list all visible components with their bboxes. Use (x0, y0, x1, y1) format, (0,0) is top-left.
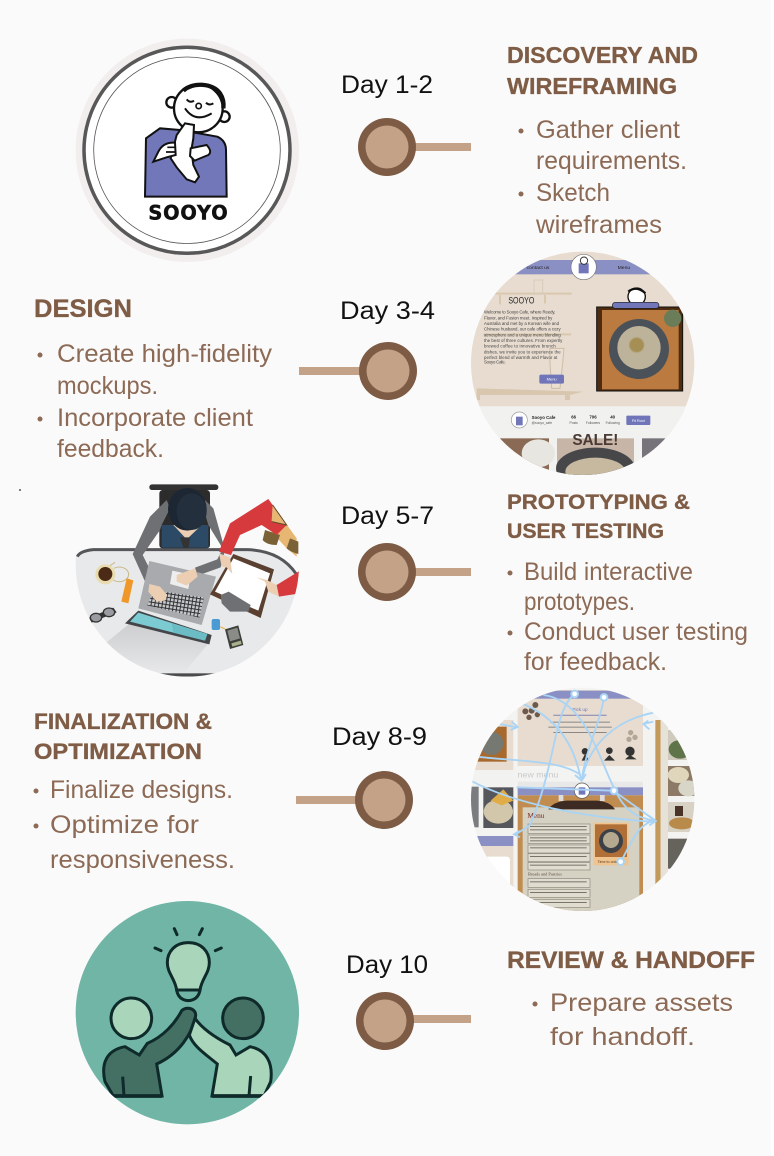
timeline day 3-4: Day 3-4 (340, 297, 435, 325)
step: design: DESIGN (34, 295, 132, 323)
instagram strip: Following (606, 421, 620, 425)
step: discovery and wireframing: Gather client (536, 116, 680, 144)
instagram strip: Sooyo Cafe (532, 415, 556, 420)
intro copy: Chinese husband, our cafe offers a cozy (484, 327, 561, 332)
step: discovery and wireframing: Sketch (536, 179, 610, 207)
menu screen on clipboard (518, 782, 643, 915)
timeline day 8-9 (296, 723, 427, 829)
chair and seated person (133, 484, 225, 587)
right person (189, 998, 271, 1096)
step: prototyping and user testing: USER TESTING (507, 520, 664, 543)
right photo column (655, 720, 698, 887)
instagram strip: 66 (571, 415, 577, 420)
timeline day 8-9: Day 8-9 (332, 723, 427, 751)
instagram strip: @sooyo_cafe (532, 421, 552, 425)
step: prototyping and user testing: prototypes. (524, 588, 635, 616)
intro copy: Flavor, and Fusion meet. Inspired by (484, 315, 553, 320)
step: design: Incorporate client (57, 404, 253, 432)
flow nodes (571, 691, 624, 865)
photo of dish on tray (597, 288, 683, 391)
step: discovery and wireframing: DISCOVERY AND (507, 42, 698, 68)
step: discovery and wireframing: requirements. (536, 147, 687, 175)
nav bar (515, 254, 650, 280)
timeline day 3-4 (299, 297, 435, 400)
instagram strip: Fit Root (632, 419, 645, 423)
instagram strip: Posts (570, 421, 578, 425)
step: review and handoff: REVIEW & HANDOFF (507, 947, 755, 974)
instagram strip (480, 406, 686, 475)
website mockup circle (471, 252, 694, 475)
flow arrows (467, 694, 657, 862)
timeline day 1-2 (341, 71, 471, 176)
step: design: Create high-fidelity (57, 340, 273, 368)
step: discovery and wireframing: WIREFRAMING (507, 73, 677, 99)
step: design: feedback. (57, 435, 164, 463)
sooyo mascot: SOOYO (148, 202, 228, 225)
nav bar: contact us (527, 265, 550, 271)
step: finalization and optimization: FINALIZATION & (34, 709, 212, 734)
step: finalization and optimization: OPTIMIZATION (34, 739, 202, 764)
sooyo mascot (145, 84, 230, 225)
coffee cup and items (89, 562, 133, 623)
menu screen on clipboard: Menu (527, 811, 545, 820)
intro copy: Welcome to Sooyo Cafe, where Reedy, (484, 310, 555, 315)
step: prototyping and user testing (507, 491, 748, 676)
instagram strip: SALE! (572, 432, 618, 449)
intro copy: Menu (547, 377, 557, 382)
step: prototyping and user testing: Build interactive (524, 558, 693, 586)
intro copy: Australia and met by a Korean wife and (484, 321, 560, 326)
step: review and handoff: for handoff. (550, 1023, 695, 1051)
step: finalization and optimization (34, 709, 235, 874)
user flow mockup circle (467, 683, 700, 917)
laptop (125, 561, 216, 644)
intro copy: dishes, we invite you to experience the (484, 349, 561, 354)
illustration: high five with light bulb (76, 901, 299, 1124)
left screens (471, 720, 514, 887)
step: discovery and wireframing (507, 42, 698, 239)
step: finalization and optimization: Finalize designs. (50, 776, 233, 804)
intro copy: Sooyo Cafe. (484, 360, 506, 365)
timeline day 5-7 (341, 502, 471, 601)
intro copy: SOOYO (508, 295, 534, 305)
menu screen on clipboard: Time to order (598, 860, 620, 864)
nav bar: Menu (618, 265, 630, 271)
left person (104, 998, 196, 1096)
step: prototyping and user testing: PROTOTYPING & (507, 491, 690, 514)
pick up screen (518, 690, 643, 766)
step: review and handoff: Prepare assets (550, 989, 733, 1017)
intro copy: perfect blend of warmth and Flavor at (484, 355, 558, 360)
step: design (34, 295, 273, 463)
instagram strip: Followers (586, 421, 600, 425)
instagram strip: 40 (610, 415, 616, 420)
light bulb (155, 929, 221, 1001)
pick up screen: Pick up (572, 707, 588, 712)
logo badge: Sooyo (76, 39, 299, 262)
step: prototyping and user testing: for feedback. (524, 648, 667, 676)
illustration: desk from above (76, 484, 300, 677)
step: review and handoff (507, 947, 755, 1051)
intro copy: atmosphere and a unique menu blending (484, 332, 561, 337)
timeline day 1-2: Day 1-2 (341, 71, 433, 99)
menu screen on clipboard: Breads and Pastries (528, 872, 562, 877)
step: prototyping and user testing: Conduct user testing (524, 618, 748, 646)
instagram strip: 706 (589, 415, 597, 420)
intro copy (477, 280, 583, 400)
step: finalization and optimization: responsiveness. (50, 846, 235, 874)
calculator and cup (212, 619, 243, 649)
step: finalization and optimization: Optimize for (50, 811, 199, 839)
timeline day 10 (346, 951, 471, 1050)
step: discovery and wireframing: wireframes (535, 211, 662, 239)
intro copy: brewed coffee to innovative brunch (484, 344, 556, 349)
new menu label: new menu (518, 770, 559, 780)
timeline day 10: Day 10 (346, 951, 428, 979)
standing colleague with clipboard (210, 499, 300, 618)
step: design: mockups. (57, 372, 158, 400)
timeline day 5-7: Day 5-7 (341, 502, 434, 530)
intro copy: the best of three cultures. From expertly (484, 338, 563, 343)
